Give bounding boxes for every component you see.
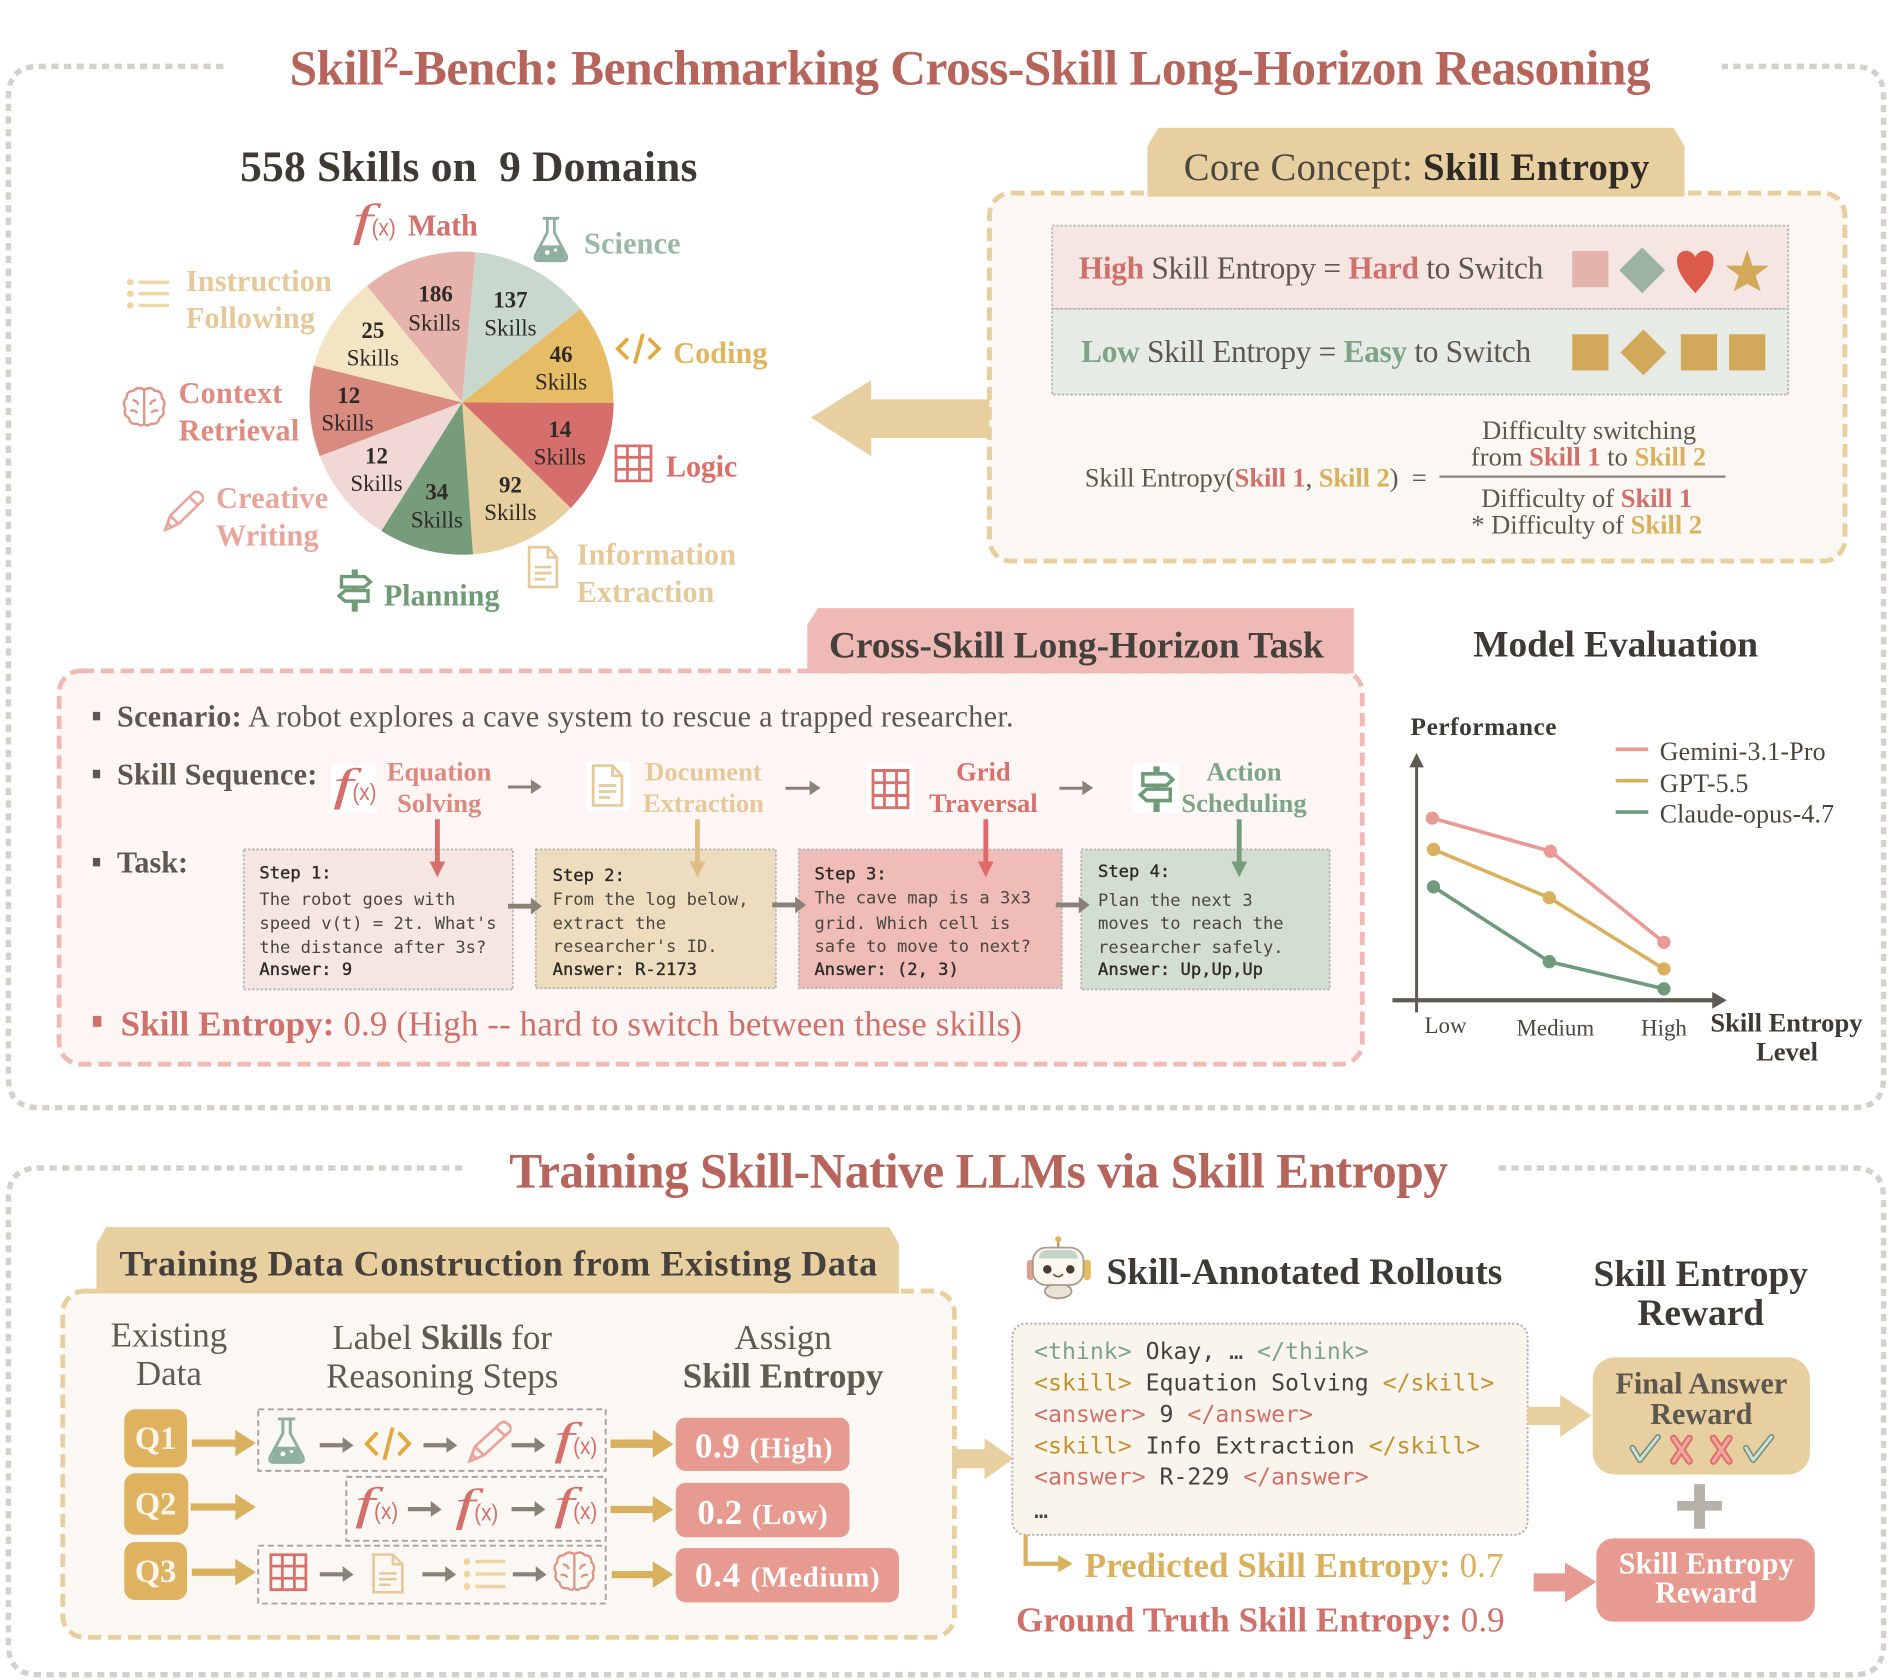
formula: skill entropy definition: Difficulty of Skill 1 bbox=[1481, 483, 1692, 513]
card: step 4: Answer: Up,Up,Up bbox=[1098, 960, 1263, 980]
line chart: performance vs skill entropy: Low bbox=[1425, 1013, 1467, 1038]
card: step 2: Step 2: bbox=[553, 866, 625, 886]
card: step 1: the distance after 3s? bbox=[259, 938, 486, 958]
pie chart: skills by domain: 12 bbox=[337, 383, 360, 408]
panel: rollout code: <think> Okay, … </think> bbox=[1034, 1339, 1369, 1365]
formula: skill entropy definition: = bbox=[1412, 462, 1427, 492]
label: Context Retrieval: Context bbox=[179, 376, 282, 410]
row: high skill entropy: High Skill Entropy = Hard to Switch bbox=[1079, 251, 1544, 286]
row: Q3: Q3 bbox=[135, 1554, 176, 1590]
legend: GPT-5.5 bbox=[1660, 769, 1748, 798]
row: Q3: 0.4 (Medium) bbox=[695, 1556, 880, 1595]
icon: math f(x): f bbox=[352, 195, 382, 246]
panel: rollout code: … bbox=[1034, 1498, 1048, 1524]
pie chart: skills by domain: 46 bbox=[550, 342, 573, 367]
tab: Core Concept heading bbox=[1148, 128, 1684, 197]
tab: Cross-Skill heading bbox=[807, 608, 1354, 673]
title: Skill2-Bench: Skill bbox=[290, 40, 384, 95]
column heading: Existing Data bbox=[111, 1316, 227, 1393]
column heading: Label Skills: Label Skills for bbox=[332, 1318, 552, 1357]
column heading: Label Skills: Reasoning Steps bbox=[326, 1357, 558, 1396]
arrow bbox=[508, 779, 542, 794]
heading: Skill Entropy Reward bbox=[1594, 1254, 1808, 1334]
step icon: equation solving: f bbox=[333, 760, 363, 810]
icon: plus bbox=[1677, 1484, 1722, 1529]
arrow: entropy to reward bbox=[1534, 1563, 1596, 1602]
arrow: rollout to final answer reward bbox=[1528, 1395, 1592, 1437]
formula: skill entropy definition: * Difficulty of Skill 2 bbox=[1471, 509, 1702, 539]
pie chart: skills by domain: 12 bbox=[365, 443, 388, 468]
label: Science: Science bbox=[584, 226, 681, 260]
pie chart: skills by domain: 186 bbox=[418, 282, 453, 307]
panel: rollout code: <skill> Equation Solving </skill> bbox=[1034, 1371, 1494, 1397]
label: Action Scheduling: Action bbox=[1206, 757, 1282, 787]
arrow: step 3 to 4 bbox=[1056, 897, 1090, 913]
pie chart: skills by domain: Skills bbox=[484, 315, 537, 340]
row: Q2 bbox=[124, 1473, 849, 1541]
heading: Skill Entropy Reward: Reward bbox=[1637, 1293, 1764, 1334]
card: step 1: Answer: 9 bbox=[259, 960, 352, 980]
pie chart: skills by domain: Skills bbox=[350, 471, 403, 496]
formula: skill entropy definition: Skill Entropy(Skill 1, Skill 2) bbox=[1085, 462, 1398, 492]
label: Creative Writing: Creative bbox=[216, 481, 328, 515]
icon: grid bbox=[616, 446, 651, 481]
pie chart: skills by domain: 25 bbox=[361, 318, 384, 343]
card: step 1: Step 1: bbox=[259, 863, 332, 883]
pie chart: skills by domain: 137 bbox=[493, 288, 528, 313]
heading: Skill Entropy Reward: Skill Entropy bbox=[1594, 1254, 1808, 1295]
panel: Skill2-Bench section frame bbox=[8, 66, 1884, 1108]
label: Context Retrieval: Retrieval bbox=[179, 413, 299, 447]
row: Q2: (x) bbox=[374, 1498, 398, 1524]
icon: document bbox=[529, 547, 557, 587]
label: Instruction Following bbox=[186, 264, 332, 335]
label: Creative Writing: Writing bbox=[216, 518, 319, 552]
line chart: performance vs skill entropy: High bbox=[1641, 1015, 1687, 1040]
card: step 4 bbox=[1081, 849, 1330, 989]
heading: 558 Skills on 9 Domains: 558 Skills on 9 Domains bbox=[240, 143, 697, 191]
step icon: equation solving: (x) bbox=[352, 779, 376, 805]
line chart: performance vs skill entropy: Skill Entropy bbox=[1710, 1008, 1862, 1038]
icon: code bbox=[618, 334, 659, 363]
arrow: skill 2 to step 2 bbox=[690, 819, 705, 877]
pie chart: skills by domain: 34 bbox=[425, 480, 449, 505]
row: Q1: (x) bbox=[573, 1433, 597, 1459]
column heading: Assign Skill Entropy: Skill Entropy bbox=[683, 1357, 884, 1396]
tab: Training Data heading: Training Data Construction from Existing Data bbox=[119, 1243, 877, 1283]
formula: skill entropy definition: Difficulty switching bbox=[1482, 415, 1696, 445]
arrow bbox=[786, 781, 821, 795]
pie chart: skills by domain: Skills bbox=[535, 370, 587, 395]
step icon: document extraction bbox=[586, 761, 630, 811]
card: step 2: From the log below, bbox=[553, 890, 749, 910]
label: Equation Solving: Equation bbox=[387, 757, 492, 787]
arrow: skill 3 to step 3 bbox=[978, 819, 994, 877]
icon: brain bbox=[124, 388, 165, 425]
label: Coding: Coding bbox=[673, 336, 767, 370]
row: Q2: Q2 bbox=[135, 1486, 176, 1522]
icon: math f(x): (x) bbox=[372, 214, 396, 240]
label: Document Extraction: Document bbox=[645, 757, 762, 787]
label: Math: Math bbox=[408, 208, 478, 242]
row: Q2: f bbox=[554, 1479, 584, 1530]
row: Q2: f bbox=[355, 1479, 385, 1530]
pie chart: skills by domain bbox=[309, 252, 614, 555]
column heading: Existing Data: Existing bbox=[111, 1316, 227, 1355]
heading: Skill-Annotated Rollouts: Skill-Annotated Rollouts bbox=[1106, 1252, 1502, 1293]
legend: Claude-opus-4.7 bbox=[1660, 799, 1834, 828]
row: Q2: f bbox=[455, 1480, 485, 1531]
card: step 4: Step 4: bbox=[1098, 862, 1170, 882]
panel: Core Concept bbox=[989, 128, 1845, 561]
card: step 4: researcher safely. bbox=[1098, 938, 1284, 958]
column heading: Assign Skill Entropy bbox=[683, 1318, 884, 1396]
row: low skill entropy bbox=[1052, 309, 1788, 395]
row: Q2: (x) bbox=[573, 1498, 597, 1524]
panel: rollout code: <answer> R-229 </answer> bbox=[1034, 1465, 1369, 1491]
label: Document Extraction bbox=[643, 757, 764, 818]
text: task label: Task: bbox=[117, 845, 188, 879]
step icon: equation solving bbox=[331, 760, 376, 813]
row: high skill entropy bbox=[1052, 226, 1788, 309]
card: step 3: Answer: (2, 3) bbox=[814, 960, 959, 980]
row: Q3 bbox=[124, 1542, 899, 1604]
tab: Cross-Skill heading: Cross-Skill Long-Horizon Task bbox=[829, 626, 1324, 667]
card: final answer reward bbox=[1593, 1357, 1810, 1474]
text: predicted skill entropy: Predicted Skill Entropy: 0.7 bbox=[1085, 1546, 1503, 1585]
line chart: performance vs skill entropy: Performance bbox=[1411, 713, 1557, 741]
icon: pencil bbox=[165, 492, 203, 530]
card: final answer reward: Final Answer bbox=[1615, 1367, 1787, 1401]
card: step 2: Answer: R-2173 bbox=[553, 960, 697, 980]
row: Q2: 0.2 (Low) bbox=[697, 1493, 828, 1532]
arrow: concept to domains bbox=[811, 380, 992, 456]
row: Q2: (x) bbox=[474, 1499, 498, 1525]
icon: flask bbox=[535, 218, 567, 261]
arrow: step 2 to 3 bbox=[772, 897, 806, 913]
label: Action Scheduling bbox=[1181, 757, 1307, 818]
text: ground truth skill entropy: Ground Truth Skill Entropy: 0.9 bbox=[1016, 1600, 1505, 1639]
panel: rollout code: <answer> 9 </answer> bbox=[1034, 1402, 1313, 1428]
icon: math f(x) bbox=[352, 195, 396, 246]
line chart: performance vs skill entropy: Medium bbox=[1517, 1015, 1594, 1040]
card: step 3 bbox=[799, 849, 1062, 988]
arrow: skill 1 to step 1 bbox=[430, 819, 445, 877]
card: skill entropy reward: Skill Entropy bbox=[1619, 1546, 1794, 1580]
arrowhead bbox=[1058, 1555, 1073, 1572]
arrow: data to rollouts bbox=[952, 1438, 1014, 1479]
title: Training Skill-Native LLMs: Training Skill-Native LLMs via Skill Entropy bbox=[509, 1143, 1448, 1198]
label: Equation Solving: Solving bbox=[397, 788, 481, 818]
legend: Gemini-3.1-Pro bbox=[1660, 737, 1826, 766]
panel: Training Data Construction bbox=[63, 1227, 954, 1637]
label: Instruction Following: Following bbox=[186, 301, 315, 335]
card: step 3: Step 3: bbox=[814, 865, 887, 885]
card: step 2: extract the bbox=[553, 914, 666, 934]
card: step 3: safe to move to next? bbox=[814, 937, 1031, 957]
label: Information Extraction: Information bbox=[577, 538, 736, 572]
label: Information Extraction: Extraction bbox=[577, 575, 715, 609]
label: Grid Traversal bbox=[929, 757, 1038, 818]
label: Grid Traversal: Traversal bbox=[929, 788, 1038, 818]
label: Equation Solving bbox=[387, 757, 492, 818]
label: Instruction Following: Instruction bbox=[186, 264, 332, 298]
tab: Core Concept heading: Core Concept: Skill Entropy bbox=[1184, 147, 1649, 189]
pie chart: skills by domain: Skills bbox=[411, 507, 463, 532]
pie chart: skills by domain: Skills bbox=[408, 311, 461, 336]
pie chart: skills by domain: Skills bbox=[484, 500, 537, 525]
card: step 2: researcher's ID. bbox=[553, 937, 718, 957]
row: Q1: f bbox=[554, 1413, 584, 1464]
card: step 1: speed v(t) = 2t. What's bbox=[259, 914, 497, 934]
card: skill entropy reward bbox=[1596, 1538, 1815, 1622]
title: Skill2-Bench: 2 bbox=[383, 41, 398, 75]
panel: rollout code: <skill> Info Extraction </skill> bbox=[1034, 1433, 1480, 1459]
icon: list bbox=[127, 279, 169, 309]
label: Document Extraction: Extraction bbox=[643, 788, 764, 818]
pie chart: skills by domain: 14 bbox=[548, 417, 572, 442]
text: skill sequence label: Skill Sequence: bbox=[117, 757, 317, 791]
label: Context Retrieval bbox=[179, 376, 299, 447]
arrow: skill 4 to step 4 bbox=[1231, 819, 1247, 877]
label: Planning: Planning bbox=[384, 579, 500, 613]
heading: Model Evaluation: Model Evaluation bbox=[1473, 624, 1758, 665]
row: Q1: Q1 bbox=[135, 1421, 176, 1457]
pie chart: skills by domain: Skills bbox=[534, 445, 586, 470]
title: Skill2-Bench: -Bench: Benchmarking Cross-Skill Long-Horizon Reasoning bbox=[398, 40, 1651, 95]
label: Action Scheduling: Scheduling bbox=[1181, 788, 1307, 818]
icon: signpost bbox=[339, 570, 370, 612]
legend bbox=[1616, 737, 1834, 828]
label: Grid Traversal: Grid bbox=[956, 757, 1011, 787]
label: Information Extraction bbox=[577, 538, 736, 609]
card: skill entropy reward: Reward bbox=[1655, 1575, 1757, 1609]
card: step 1 bbox=[244, 849, 513, 989]
formula: skill entropy definition: from Skill 1 to Skill 2 bbox=[1471, 442, 1706, 472]
step icon: action scheduling bbox=[1133, 763, 1179, 813]
label: Creative Writing bbox=[216, 481, 328, 552]
panel: Cross-Skill Long-Horizon Task bbox=[59, 608, 1362, 1064]
pie chart: skills by domain: Skills bbox=[347, 346, 399, 371]
line chart: performance vs skill entropy bbox=[1392, 713, 1862, 1067]
row: Q1: 0.9 (High) bbox=[695, 1427, 833, 1466]
tab: Training Data heading bbox=[97, 1227, 899, 1293]
row: low skill entropy: Low Skill Entropy = Easy to Switch bbox=[1081, 334, 1532, 369]
arrow bbox=[1059, 781, 1093, 795]
pie chart: skills by domain: 92 bbox=[499, 472, 522, 497]
column heading: Existing Data: Data bbox=[136, 1354, 202, 1393]
row: Q1 bbox=[124, 1409, 849, 1471]
arrow: step 1 to 2 bbox=[508, 898, 542, 915]
step icon: grid traversal bbox=[866, 764, 913, 814]
card: step 3: The cave map is a 3x3 bbox=[814, 889, 1031, 909]
pie chart: skills by domain: Skills bbox=[321, 411, 374, 436]
card: step 4: Plan the next 3 bbox=[1098, 891, 1253, 911]
card: step 3: grid. Which cell is bbox=[814, 914, 1010, 934]
card: step 4: moves to reach the bbox=[1098, 914, 1284, 934]
icon: robot bbox=[1027, 1236, 1091, 1298]
column heading: Label Skills bbox=[326, 1318, 558, 1396]
panel: rollout code bbox=[1012, 1324, 1528, 1535]
arrow: rollout to predicted entropy bbox=[1026, 1535, 1059, 1564]
panel: Training section frame bbox=[8, 1168, 1884, 1675]
formula: skill entropy definition bbox=[1085, 415, 1725, 539]
text: scenario: Scenario: A robot explores a cave system to rescue a trapped researcher. bbox=[117, 699, 1014, 733]
card: final answer reward: Reward bbox=[1650, 1397, 1753, 1431]
text: skill entropy result: Skill Entropy: 0.9 (High -- hard to switch between these skills) bbox=[121, 1004, 1022, 1043]
card: step 1: The robot goes with bbox=[259, 890, 455, 910]
card: step 2 bbox=[536, 849, 776, 988]
line chart: performance vs skill entropy: Level bbox=[1756, 1037, 1818, 1067]
column heading: Assign Skill Entropy: Assign bbox=[735, 1318, 832, 1357]
label: Logic: Logic bbox=[666, 450, 737, 484]
